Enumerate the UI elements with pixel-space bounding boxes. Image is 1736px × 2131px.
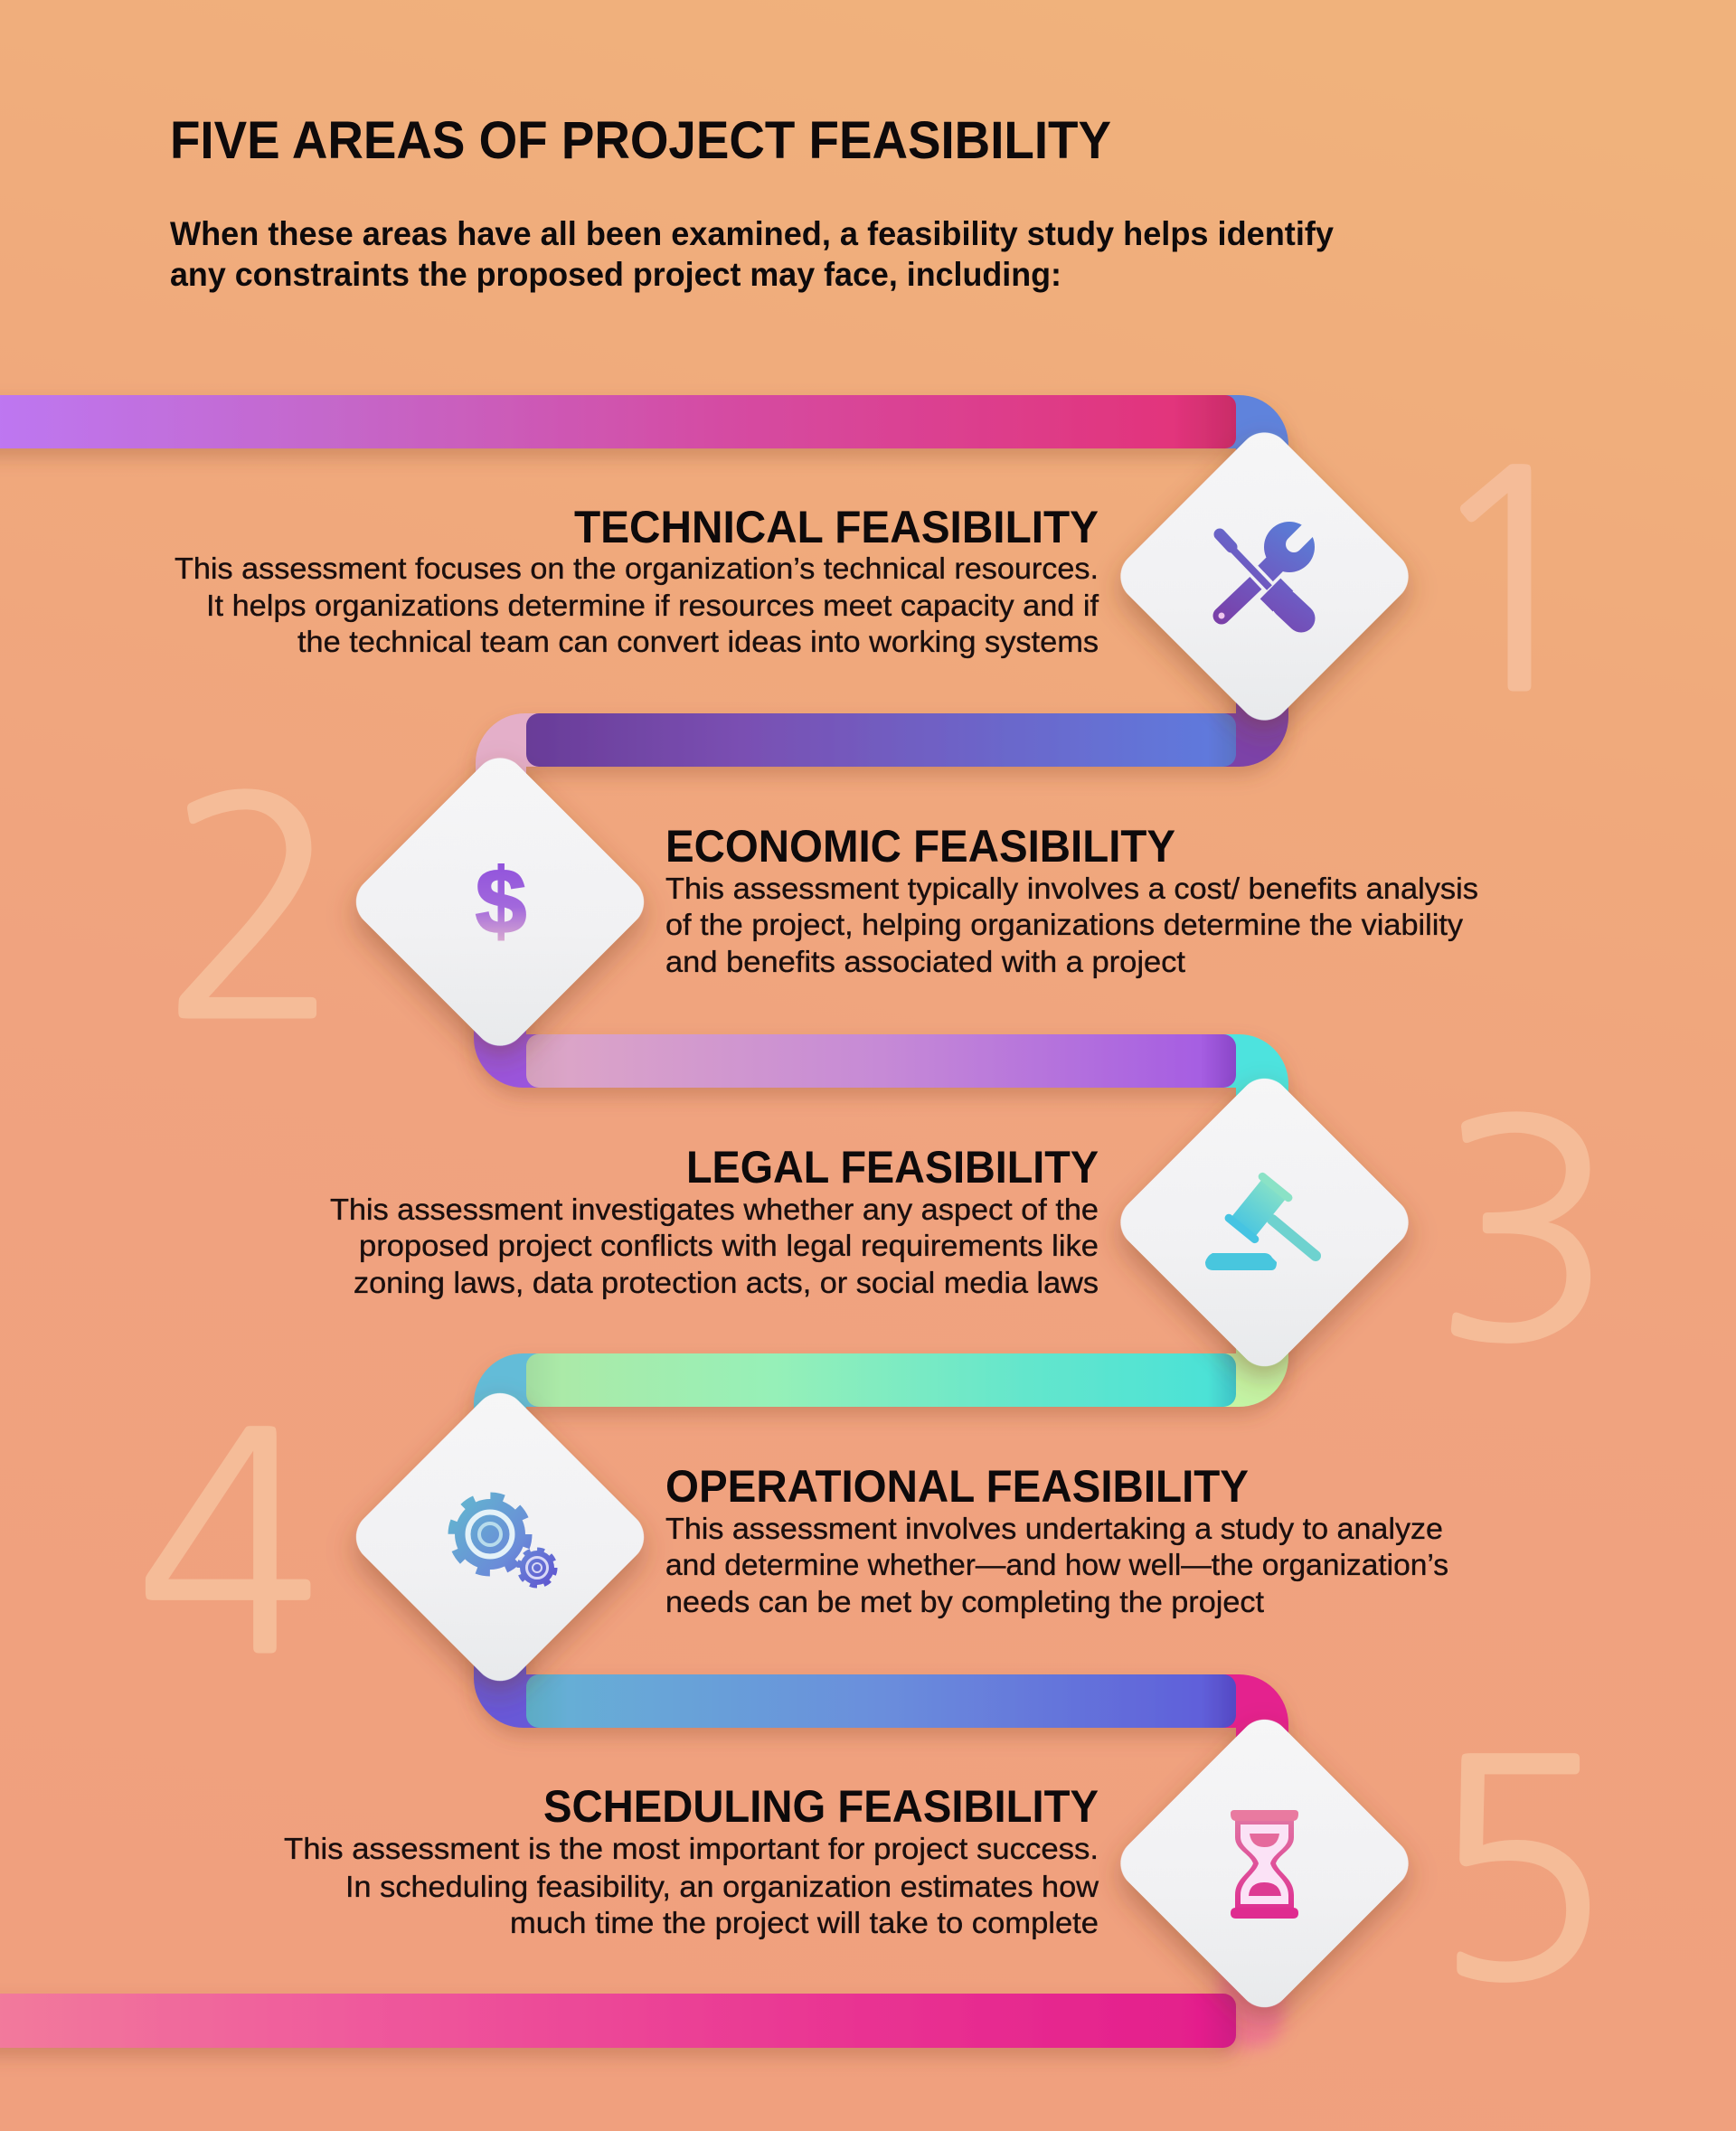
panel: legal diamond: [1109, 1068, 1420, 1377]
text block: technical feasibility: It helps organizations determine if resources meet capacity and if: [206, 589, 1099, 623]
intro text: [170, 215, 1334, 293]
number 1: 1: [1419, 431, 1601, 732]
icon: wrench and screwdriver: [1219, 520, 1318, 618]
text block: legal feasibility: proposed project conflicts with legal requirements like: [359, 1230, 1099, 1263]
panel: operational diamond: [345, 1382, 655, 1692]
connector: bar 2: [476, 649, 1288, 831]
text block: operational feasibility: needs can be met by completing the project: [665, 1586, 1265, 1619]
connector: bar 5: [474, 1610, 1288, 1792]
connector: bar 3: [474, 970, 1288, 1152]
connector: bar 6: [0, 1994, 1236, 2048]
icon: dollar sign: $: [476, 850, 526, 953]
number 3: 3: [1433, 1081, 1616, 1382]
text block: technical feasibility: [175, 502, 1099, 659]
text block: economic feasibility: This assessment typically involves a cost/ benefits analysis: [665, 872, 1478, 906]
connector: bottom corner glow: [1221, 1944, 1284, 2048]
text block: legal feasibility: This assessment investigates whether any aspect of the: [330, 1193, 1099, 1227]
icon: gavel: [1205, 1171, 1316, 1270]
panel: economic diamond: [345, 747, 655, 1057]
connector: bar 4: [474, 1289, 1288, 1471]
panel: scheduling diamond: [1109, 1709, 1420, 2018]
text block: scheduling feasibility: In scheduling feasibility, an organization estimates how: [345, 1871, 1099, 1904]
text block: scheduling feasibility: This assessment is the most important for project success.: [284, 1833, 1099, 1866]
connector: bar 1: [0, 395, 1288, 513]
text block: legal feasibility: zoning laws, data protection acts, or social media laws: [354, 1267, 1099, 1300]
intro text: When these areas have all been examined, a feasibility study helps identify: [170, 215, 1334, 252]
icon: hourglass: [1231, 1810, 1298, 1919]
text block: technical feasibility: the technical team can convert ideas into working systems: [297, 626, 1099, 659]
text block: economic feasibility: ECONOMIC FEASIBILITY: [665, 821, 1175, 872]
text block: operational feasibility: This assessment involves undertaking a study to analyze: [665, 1513, 1443, 1546]
text block: technical feasibility: This assessment focuses on the organization’s technical resources.: [175, 552, 1099, 586]
text block: operational feasibility: and determine whether—and how well—the organization’s: [665, 1549, 1448, 1582]
text block: operational feasibility: OPERATIONAL FEASIBILITY: [665, 1461, 1249, 1512]
text block: scheduling feasibility: much time the project will take to complete: [510, 1907, 1099, 1940]
number 2: 2: [161, 759, 344, 1060]
text block: legal feasibility: [330, 1142, 1099, 1300]
text block: economic feasibility: of the project, helping organizations determine the viability: [665, 909, 1463, 942]
number 5: 5: [1428, 1721, 1610, 2022]
text block: economic feasibility: [665, 821, 1478, 979]
text block: legal feasibility: LEGAL FEASIBILITY: [686, 1142, 1099, 1193]
title: FIVE AREAS OF PROJECT FEASIBILITY: [170, 111, 1111, 170]
text block: economic feasibility: and benefits associated with a project: [665, 946, 1186, 979]
panel: technical diamond: [1109, 421, 1420, 731]
text block: operational feasibility: [665, 1461, 1448, 1619]
text block: scheduling feasibility: [284, 1781, 1099, 1940]
intro text: any constraints the proposed project may face, including:: [170, 256, 1061, 293]
icon: gears: [452, 1496, 555, 1586]
text block: technical feasibility: TECHNICAL FEASIBILITY: [574, 502, 1099, 552]
text block: scheduling feasibility: SCHEDULING FEASIBILITY: [543, 1781, 1099, 1832]
number 4: 4: [137, 1393, 319, 1694]
